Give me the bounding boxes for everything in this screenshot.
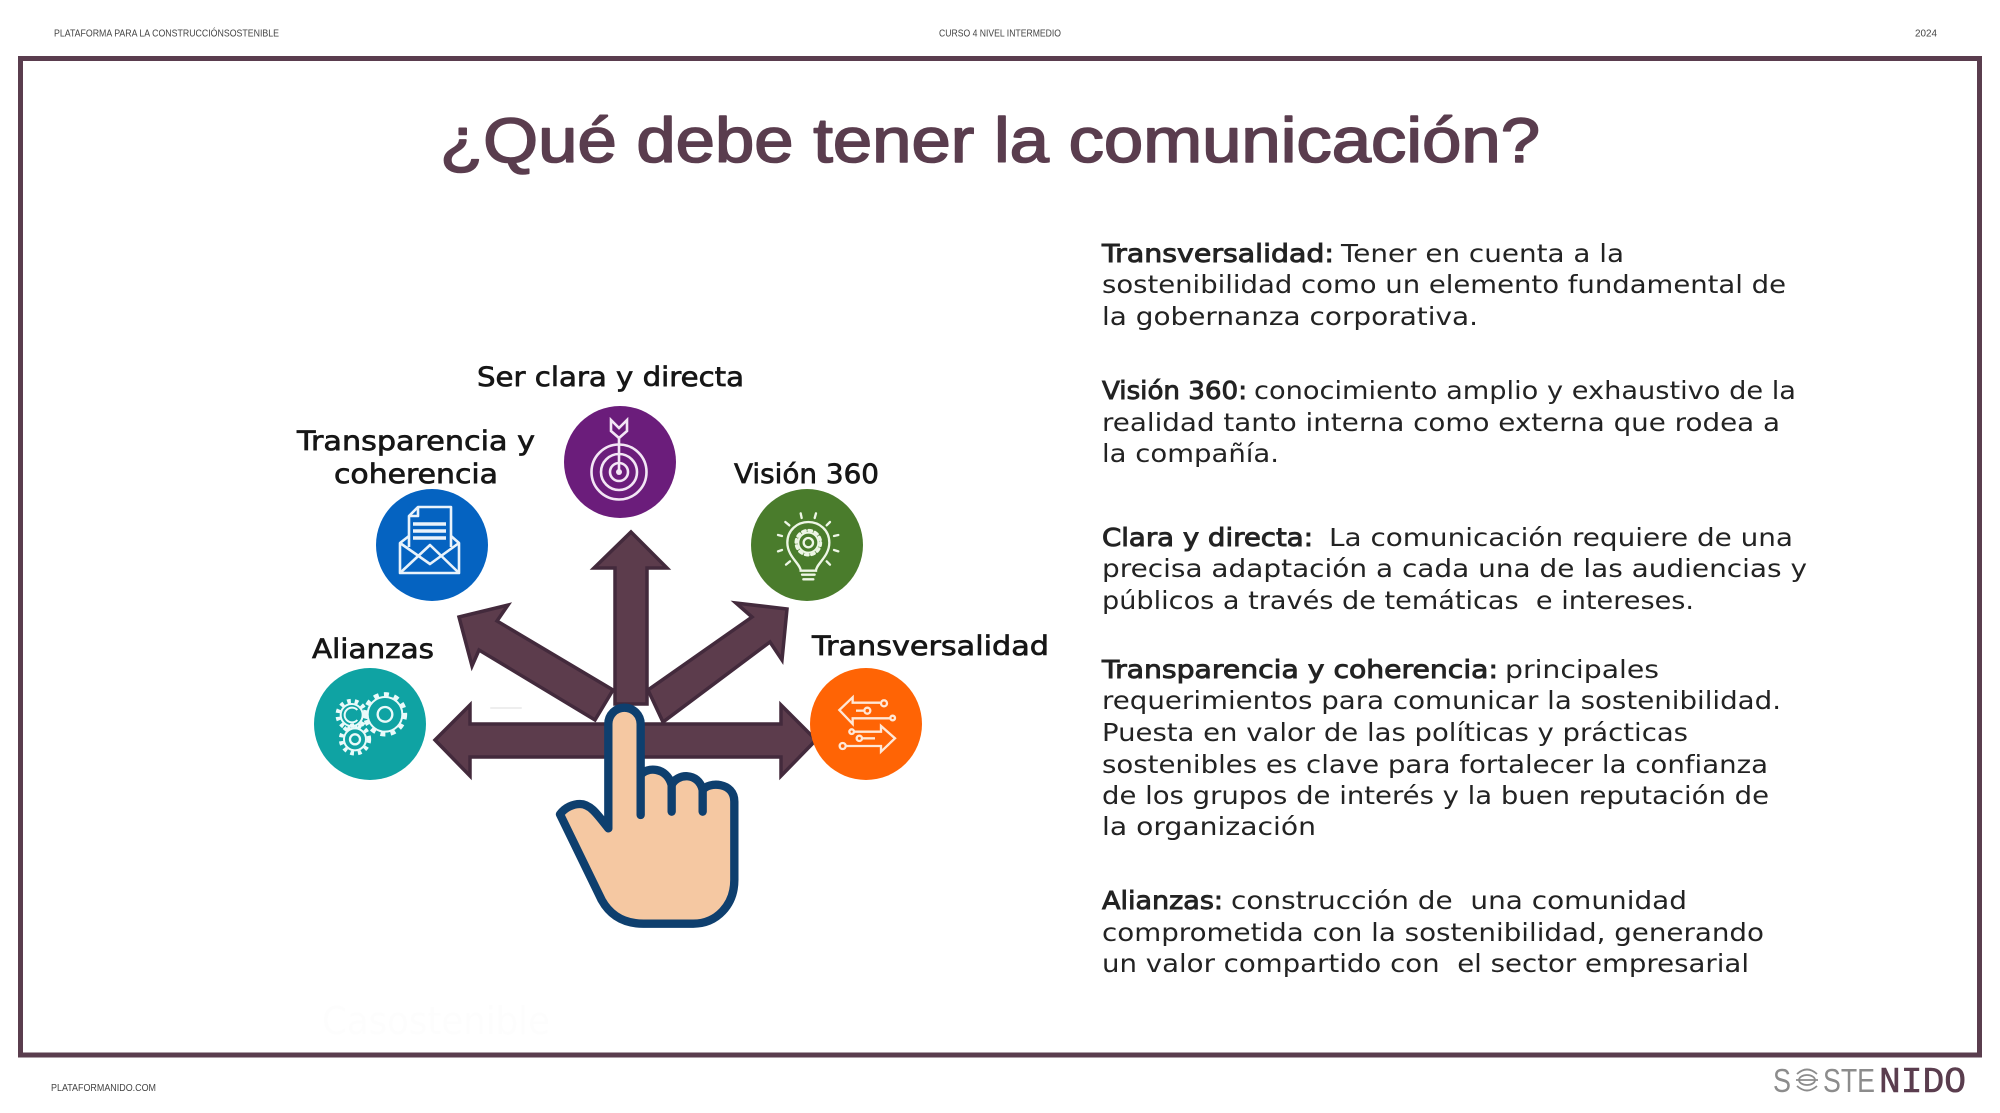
text block: Visión 360: Visión 360: [1102,376,1247,405]
text block: Transparencia y coherencia: la organización [1102,812,1316,841]
smudge near left arrow [490,707,522,709]
text block: Transparencia y coherencia: principales [1505,655,1659,684]
text block: Transversalidad [1101,239,1786,331]
text block: Alianzas: un valor compartido con el sector empresarial [1102,949,1749,978]
text block: Visión 360 [1102,376,1796,468]
icon: pointing hand [560,708,734,924]
text block: Transparencia y coherencia [1101,655,1781,841]
icon: circuit arrows circle (orange) [810,668,922,780]
text block: Transparencia y coherencia: de los grupos de interés y la buen reputación de [1102,781,1769,810]
header: year: 2024 [1915,28,1937,40]
text block: Clara y directa: precisa adaptación a cada una de las audiencias y [1102,554,1807,583]
logo: SOSTENIDO: STE [1823,1062,1875,1099]
title: ¿Qué debe tener la comunicación? [440,106,1540,176]
icon: gears circle (teal) [314,668,426,780]
text block: Visión 360: realidad tanto interna como externa que rodea a [1102,408,1780,437]
text block: Transversalidad: sostenibilidad como un elemento fundamental de [1102,270,1786,299]
text block: Transparencia y coherencia: Transparencia y coherencia: [1101,655,1498,684]
text block: Alianzas: comprometida con la sostenibilidad, generando [1102,918,1764,947]
text block: Alianzas [1102,886,1764,978]
arrow: left and right [435,705,816,776]
footer: website: PLATAFORMANIDO.COM [51,1083,156,1094]
text block: Clara y directa [1102,523,1807,615]
header: course: CURSO 4 NIVEL INTERMEDIO [939,28,1061,40]
text block: Transversalidad: Tener en cuenta a la [1340,239,1624,268]
label: Transversalidad: Transversalidad [811,631,1049,662]
label: Visión 360: Visión 360 [734,459,879,490]
text block: Alianzas: construcción de una comunidad [1231,886,1687,915]
text block: Transversalidad: Transversalidad: [1101,239,1334,268]
arrow: upper right [648,603,787,722]
text block: Transversalidad: la gobernanza corporativa. [1102,302,1478,331]
label: Transparencia y coherencia: Transparencia y [296,426,535,457]
label: Transparencia y coherencia [296,426,535,490]
text block: Visión 360: conocimiento amplio y exhaustivo de la [1254,376,1796,405]
arrows diagram [435,532,816,776]
label: Ser clara y directa: Ser clara y directa [477,362,744,393]
text block: Clara y directa: La comunicación requiere de una [1329,523,1793,552]
text block: Transparencia y coherencia: Puesta en valor de las políticas y prácticas [1102,718,1688,747]
logo: SOSTENIDO: NIDO [1879,1062,1966,1103]
logo: SOSTENIDO: S [1773,1062,1791,1099]
icon: target circle (purple) [564,406,676,518]
text block: Clara y directa: Clara y directa: [1102,523,1313,552]
icon: light bulb circle (green) [751,489,863,601]
faint ghost text: Casostenible [322,999,550,1043]
icon: envelope circle (blue) [376,489,488,601]
arrow: upper left [459,605,613,720]
arrow: up [594,532,667,704]
text block: Transparencia y coherencia: requerimientos para comunicar la sostenibilidad. [1102,686,1781,715]
text block: Alianzas: Alianzas: [1102,886,1223,915]
text block: Transparencia y coherencia: sostenibles es clave para fortalecer la confianza [1102,750,1768,779]
text block: Visión 360: la compañía. [1102,439,1279,468]
logo: SOSTENIDO [1773,1062,1966,1103]
label: Transparencia y coherencia: coherencia [334,459,498,490]
header: organisation: PLATAFORMA PARA LA CONSTRUCCIÓNSOSTENIBLE [54,26,279,40]
label: Alianzas: Alianzas [312,634,434,665]
text block: Clara y directa: públicos a través de temáticas e intereses. [1102,586,1694,615]
